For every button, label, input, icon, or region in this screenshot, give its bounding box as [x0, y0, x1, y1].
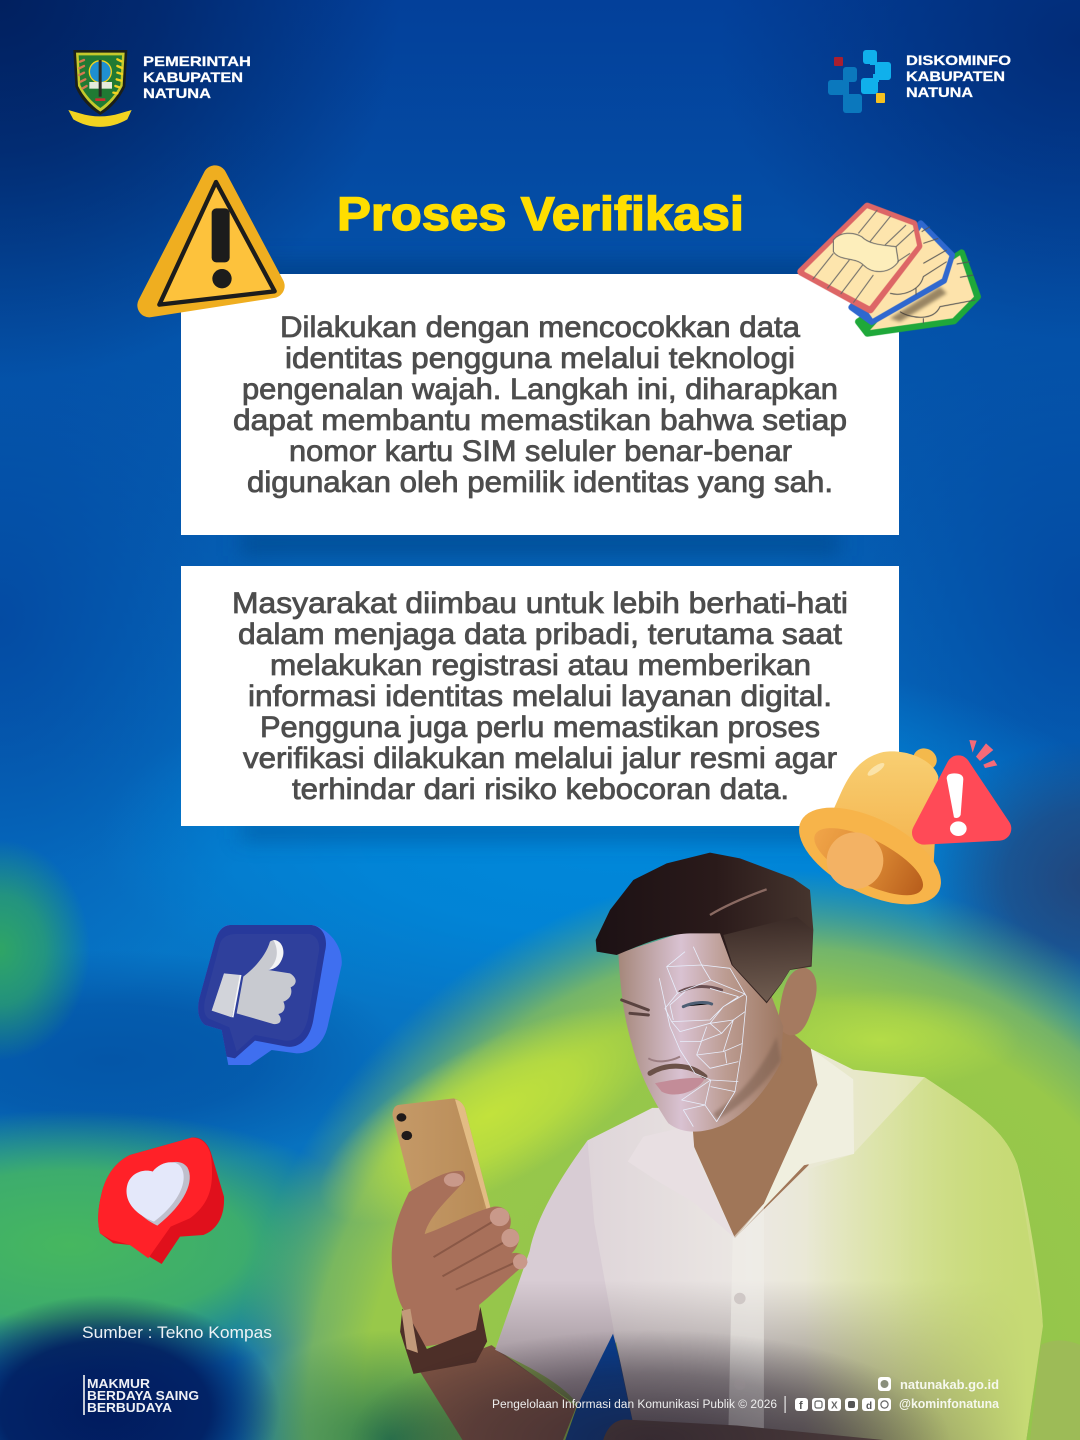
- gap behind arm: [565, 1334, 641, 1440]
- face: [618, 930, 783, 1132]
- text: government name: KABUPATEN: [143, 70, 243, 85]
- text: advice description: dalam menjaga data pribadi, terutama saat: [238, 618, 842, 651]
- icons: social media: [795, 1398, 891, 1412]
- ear: [778, 967, 817, 1035]
- text: advice description: Pengguna juga perlu memastikan proses: [260, 711, 820, 744]
- icon: website: [878, 1377, 891, 1391]
- text: government name: [143, 54, 251, 101]
- logo: Pemerintah Kabupaten Natuna: [68, 50, 251, 127]
- text: advice description: terhindar dari risiko kebocoran data.: [292, 773, 789, 806]
- text: diskominfo name: DISKOMINFO: [906, 53, 1011, 68]
- thumb hand: [212, 940, 296, 1024]
- text: website: natunakab.go.id: [900, 1378, 999, 1392]
- left collar: [628, 1125, 735, 1238]
- text: advice description: [232, 587, 848, 806]
- man's body and shirt: [420, 1024, 1043, 1440]
- text: verification description: pengenalan wajah. Langkah ini, diharapkan: [242, 373, 838, 406]
- heart: [130, 1162, 190, 1226]
- icon: warning triangle: [149, 177, 275, 305]
- red SIM card: [801, 207, 918, 309]
- torso: [588, 1049, 1043, 1440]
- blue SIM card: [851, 223, 952, 322]
- text: government name: NATUNA: [143, 86, 211, 101]
- phone and hand: [392, 1098, 527, 1374]
- text: verification description: identitas pengguna melalui teknologi: [285, 342, 795, 375]
- text: verification description: digunakan oleh pemilik identitas yang sah.: [247, 466, 833, 499]
- watch: [400, 1307, 487, 1374]
- icon: diskominfo pixels: [828, 50, 891, 113]
- bell: [784, 745, 956, 924]
- panel: public advice: [181, 566, 899, 826]
- forearm: [420, 1345, 576, 1440]
- icon: thumbs up bubble: [198, 925, 342, 1065]
- text: verification description: nomor kartu SIM seluler benar-benar: [289, 435, 792, 468]
- right collar: [735, 1049, 854, 1238]
- lower arm: [603, 1420, 884, 1440]
- icons: social media: d: [866, 1401, 872, 1412]
- buttons: [734, 1293, 746, 1390]
- illustration: man with phone and face scan: [392, 853, 1043, 1440]
- hand: [392, 1171, 527, 1349]
- text: diskominfo name: NATUNA: [906, 85, 973, 100]
- text: advice description: melakukan registrasi atau memberikan: [270, 649, 811, 682]
- panel: verification process: [181, 274, 899, 535]
- neck: [684, 1024, 820, 1238]
- text: verification description: [233, 311, 847, 499]
- sparks: [969, 740, 997, 768]
- panel shadows: [240, 262, 840, 840]
- text: social handle: @kominfonatuna: [899, 1397, 1000, 1411]
- icon: coat of arms: [68, 50, 132, 127]
- footer: [492, 1377, 1000, 1413]
- tagline: Makmur Berdaya Saing Berbudaya: MAKMUR: [87, 1376, 151, 1391]
- text: copyright: Pengelolaan Informasi dan Komunikasi Publik © 2026: [492, 1399, 777, 1411]
- text: diskominfo name: KABUPATEN: [906, 69, 1005, 84]
- phone: [392, 1098, 505, 1271]
- logo: Diskominfo Kabupaten Natuna: [828, 50, 1011, 113]
- tagline: Makmur Berdaya Saing Berbudaya: BERDAYA SAING: [87, 1388, 199, 1403]
- icon: SIM cards: [801, 207, 978, 333]
- text: source: Sumber : Tekno Kompas: [82, 1323, 272, 1342]
- text: advice description: informasi identitas melalui layanan digital.: [248, 680, 832, 713]
- text: advice description: Masyarakat diimbau untuk lebih berhati-hati: [232, 587, 848, 620]
- face mesh: [659, 947, 747, 1127]
- hair: [596, 853, 813, 1003]
- icons: social media: X: [831, 1400, 838, 1412]
- icon: bell with alert: [784, 740, 999, 924]
- tagline: Makmur Berdaya Saing Berbudaya: BERBUDAYA: [87, 1400, 173, 1415]
- title: Proses Verifikasi: [337, 187, 744, 240]
- text: diskominfo name: [906, 53, 1011, 100]
- text: verification description: dapat membantu memastikan bahwa setiap: [233, 404, 847, 437]
- tagline: Makmur Berdaya Saing Berbudaya: [83, 1375, 199, 1415]
- icons: social media: f: [799, 1400, 803, 1412]
- alert triangle: [924, 740, 999, 836]
- button placket: [728, 1204, 764, 1440]
- sleeve: [495, 1140, 621, 1406]
- icon: heart bubble: [98, 1138, 224, 1264]
- text: government name: PEMERINTAH: [143, 54, 251, 69]
- head: [596, 853, 817, 1132]
- text: verification description: Dilakukan dengan mencocokkan data: [280, 311, 801, 344]
- text: advice description: verifikasi dilakukan melalui jalur resmi agar: [243, 742, 837, 775]
- green SIM card: [858, 253, 978, 333]
